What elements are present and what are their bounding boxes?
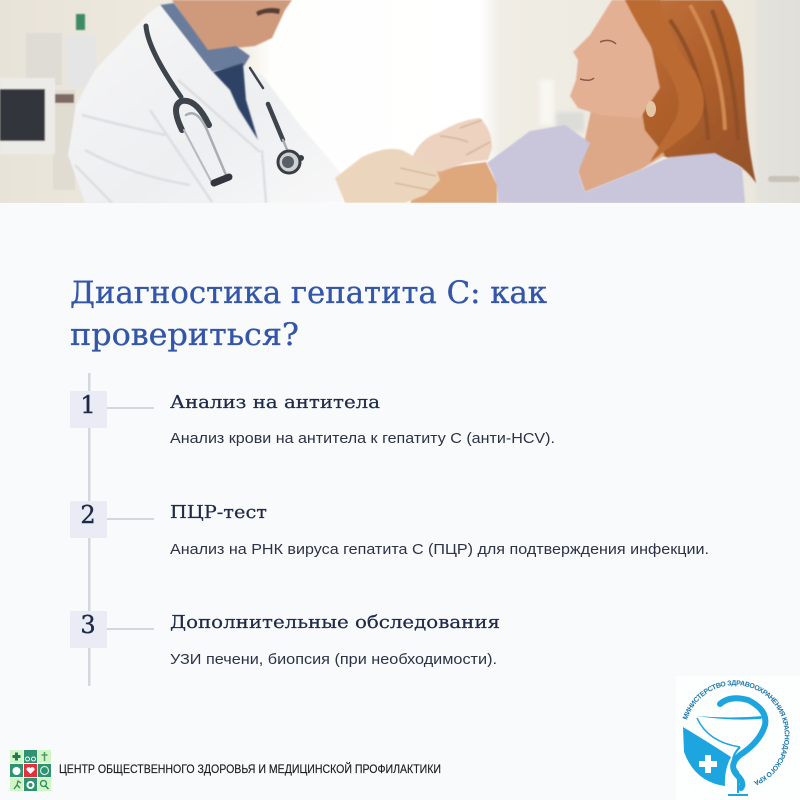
connector 2 xyxy=(107,518,154,520)
emblem serpent xyxy=(720,698,765,788)
title: Диагностика гепатита С: как xyxy=(70,275,547,311)
timeline line xyxy=(88,373,90,686)
doctor xyxy=(68,0,342,203)
face xyxy=(570,0,660,118)
title xyxy=(70,275,547,353)
stethoscope chest piece xyxy=(278,151,304,173)
emblem cross xyxy=(699,755,717,773)
upper gloved hand xyxy=(412,118,492,172)
step 1 xyxy=(70,391,555,447)
step 3 xyxy=(70,611,500,668)
number 1: 1 xyxy=(80,391,96,419)
emblem bowl rim xyxy=(697,716,763,720)
white coat xyxy=(68,5,342,203)
moustache and lips xyxy=(256,8,280,16)
number box 3 xyxy=(70,611,107,648)
description 2: Анализ на РНК вируса гепатита С (ПЦР) для подтверждения инфекции. xyxy=(170,542,709,558)
stethoscope xyxy=(146,26,288,183)
step 2 xyxy=(70,501,709,558)
heading 2: ПЦР-тест xyxy=(170,502,267,523)
emblem white background xyxy=(676,676,800,800)
clinic room background xyxy=(0,0,800,203)
forearm xyxy=(410,162,497,203)
eye and mouth xyxy=(580,40,616,80)
emblem blue crescent xyxy=(683,727,731,786)
coat fold shadows xyxy=(75,80,266,203)
neck xyxy=(578,112,666,192)
earring xyxy=(646,101,656,117)
description 1: Анализ крови на антитела к гепатиту С (анти-HCV). xyxy=(170,431,555,447)
lavender shirt xyxy=(487,125,745,203)
lower gloved hand xyxy=(335,149,440,203)
door handle xyxy=(768,176,800,182)
number box 2 xyxy=(70,501,107,538)
emblem stem xyxy=(728,747,748,795)
connector 1 xyxy=(107,407,154,409)
number box 1 xyxy=(70,391,107,428)
heading 3: Дополнительные обследования xyxy=(170,612,500,633)
doctor neck and chin xyxy=(172,0,292,51)
emblem bowl edge xyxy=(697,718,740,747)
title: провериться? xyxy=(70,317,299,353)
hair front xyxy=(625,0,704,162)
photo: doctor and patient xyxy=(0,0,800,203)
number 3: 3 xyxy=(80,611,96,639)
stethoscope lower piece xyxy=(214,177,229,183)
number 2: 2 xyxy=(80,501,96,529)
emblem ring text: МИНИСТЕРСТВО ЗДРАВООХРАНЕНИЯ КРАСНОДАРСКОГО КРАЯ xyxy=(682,680,790,785)
footer logo: public health center xyxy=(10,750,51,791)
necktie xyxy=(213,63,258,140)
footer organisation name: ЦЕНТР ОБЩЕСТВЕННОГО ЗДОРОВЬЯ И МЕДИЦИНСКОЙ ПРОФИЛАКТИКИ xyxy=(59,761,441,776)
hair strands xyxy=(670,5,738,140)
medical equipment xyxy=(0,14,96,190)
description 3: УЗИ печени, биопсия (при необходимости). xyxy=(170,652,497,668)
blurred room details xyxy=(540,80,584,132)
hair behind xyxy=(624,0,757,184)
shirt collar xyxy=(160,3,250,72)
connector 3 xyxy=(107,628,154,630)
heading 1: Анализ на антитела xyxy=(170,392,380,413)
patient xyxy=(335,0,800,203)
